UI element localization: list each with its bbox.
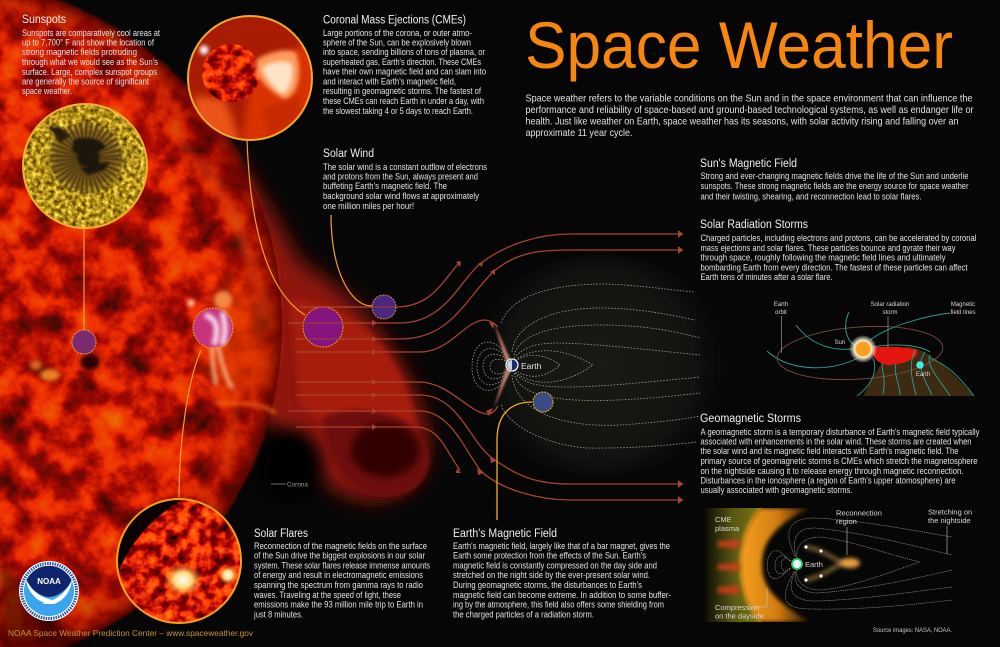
- text: solar flares: system. These solar flares release immense amounts: [254, 560, 430, 570]
- footer credit: NOAA Space Weather Prediction Center – www.spaceweather.gov: [8, 628, 254, 638]
- source credit: Source images: NASA, NOAA.: [873, 627, 952, 634]
- text: earth's magnetic field: magnetic field is constantly compressed on the day side and: [453, 560, 657, 570]
- text: solar flares: of energy and result in electromagnetic emissions: [254, 570, 424, 580]
- text: geomagnetic storms: usually associated with geomagnetic storms.: [700, 485, 852, 495]
- text: coronal mass ejections: into space, sending billions of tons of plasma, or: [323, 47, 485, 57]
- diagram: CME and magnetosphere: region: [836, 517, 857, 526]
- earth: [506, 359, 542, 371]
- text: geomagnetic storms: on the nightside causing it to release energy through magnetic reconnection.: [700, 466, 964, 476]
- text: earth's magnetic field: Earth's Magnetic Field: [453, 528, 557, 540]
- diagram: solar radiation storm: storm: [882, 310, 898, 316]
- diagram: CME and magnetosphere: [705, 508, 972, 622]
- diagram: CME and magnetosphere: plasma: [715, 524, 740, 533]
- diagram: solar radiation storm: Sun: [835, 340, 845, 346]
- text: solar wind: Solar Wind: [323, 148, 374, 160]
- text: sunspots: surface. Large, complex sunspot groups: [22, 67, 158, 77]
- marker: CME: [303, 307, 343, 347]
- text: sunspots: through what we would see as the Sun's: [22, 57, 159, 67]
- text: solar radiation storms: mass ejections and solar flares. These particles bounce and gyrate their way: [700, 243, 956, 253]
- text: sunspots: Sunspots: [22, 14, 66, 26]
- earth magnetic field lines: [472, 284, 700, 448]
- red lines over markers: [288, 307, 395, 339]
- earth magnetotail glow: [465, 255, 735, 475]
- diagram: solar radiation storm: orbit: [775, 310, 787, 316]
- text: solar radiation storms: Earth tens of minutes after a solar flare.: [700, 272, 832, 282]
- text: solar wind: and protons from the Sun, always present and: [323, 172, 478, 182]
- text: coronal mass ejections: these CMEs can reach Earth in under a day, with: [323, 96, 484, 106]
- text: solar flares: Reconnection of the magnetic fields on the surface: [254, 541, 427, 551]
- NOAA logo: NOAA: [37, 577, 61, 586]
- text: solar wind: one million miles per hour!: [323, 201, 414, 211]
- text: earth's magnetic field: Earth some protection from the effects of the Sun. Earth's: [453, 550, 647, 560]
- text: earth's magnetic field: [453, 528, 671, 620]
- text: solar radiation storms: bombarding Earth from every direction. The fastest of these particles can affect: [700, 262, 968, 272]
- diagram: solar radiation storm: Earth: [916, 372, 930, 378]
- title: Space Weather: [525, 8, 953, 82]
- text: solar radiation storms: Solar Radiation Storms: [700, 219, 808, 231]
- text: solar flares: just 8 minutes.: [253, 610, 303, 620]
- intro text: [526, 94, 974, 139]
- text: sun's magnetic field: Sun's Magnetic Field: [700, 158, 797, 170]
- NOAA logo: [19, 561, 79, 621]
- diagram: CME and magnetosphere: Compression: [715, 603, 759, 612]
- leader lines: [84, 140, 532, 520]
- corona label: [271, 482, 308, 488]
- marker: solar wind: [372, 295, 396, 319]
- text: sun's magnetic field: Strong and ever-changing magnetic fields drive the life of the Sun and underlie: [700, 171, 969, 181]
- diagram: solar radiation storm: field lines: [950, 310, 976, 316]
- text: sunspots: up to 7,700° F and show the location of: [22, 38, 154, 48]
- text: solar radiation storms: [700, 219, 977, 282]
- diagram: solar radiation storm: Earth: [774, 302, 788, 308]
- inset: CME photo: [187, 15, 313, 141]
- diagram: CME and magnetosphere: Reconnection: [836, 508, 882, 518]
- text: coronal mass ejections: superheated gas, Earth's direction. These CMEs: [323, 57, 482, 67]
- diagram: solar radiation storm: [767, 302, 976, 396]
- diagram: CME and magnetosphere: Stretching on: [928, 508, 972, 516]
- text: earth's magnetic field: magnetic field can become extreme. In addition to some buffer-: [453, 590, 671, 600]
- earth: Earth: [521, 361, 542, 371]
- text: solar radiation storms: through space, roughly following the magnetic field lines and ultimately: [700, 252, 946, 262]
- text: coronal mass ejections: resulting in geomagnetic storms. The fastest of: [323, 86, 481, 96]
- text: earth's magnetic field: Earth's magnetic field, largely like that of a bar magnet, gives the: [453, 541, 670, 551]
- text: geomagnetic storms: [700, 413, 980, 495]
- text: geomagnetic storms: Disturbances in the ionosphere (a region of Earth's upper atomosphere) are: [700, 476, 956, 486]
- text: earth's magnetic field: During geomagnetic storms, the disturbances to Earth's: [453, 580, 643, 590]
- text: solar flares: of the Sun drive the biggest explosions in our solar: [254, 550, 425, 560]
- text: coronal mass ejections: and interact with Earth's magnetic field,: [323, 76, 456, 86]
- text: sunspots: space weather.: [22, 86, 72, 96]
- text: geomagnetic storms: Geomagnetic Storms: [700, 413, 801, 425]
- inset: sunspot photo: [23, 104, 147, 228]
- text: sun's magnetic field: and their twisting, shearing, and reconnection lead to solar flares.: [700, 192, 922, 202]
- text: solar flares: Solar Flares: [254, 528, 308, 540]
- text: coronal mass ejections: the slowest taking 4 or 5 days to reach Earth.: [323, 106, 473, 116]
- text: solar flares: spanning the spectrum from gamma rays to radio: [254, 580, 423, 590]
- prominence loop: [322, 410, 429, 497]
- text: sunspots: strong magnetic fields protruding: [22, 47, 137, 57]
- text: sunspots: are generally the source of significant: [22, 76, 149, 86]
- earth in diagram: [916, 361, 924, 369]
- text: solar flares: [253, 528, 430, 620]
- intro text: approximate 11 year cycle.: [526, 128, 632, 139]
- diagram: CME and magnetosphere: on the dayside: [715, 612, 764, 620]
- text: geomagnetic storms: the solar wind and its magnetic field interacts with Earth's magnetic field. The: [700, 446, 959, 456]
- text: earth's magnetic field: ing by the atmosphere, this field also offers some shielding from: [453, 600, 664, 610]
- text: solar wind: The solar wind is a constant outflow of electrons: [323, 162, 488, 172]
- text: solar flares: emissions make the 93 million mile trip to Earth in: [254, 600, 423, 610]
- text: solar wind: buffeting Earth's magnetic field. The: [323, 181, 447, 191]
- diagram: CME and magnetosphere: Earth: [805, 560, 823, 569]
- text: sunspots: Sunspots are comparatively cool areas at: [22, 28, 160, 38]
- text: sunspots: [22, 14, 160, 96]
- marker: solar flare: [193, 308, 233, 348]
- corona label: Corona: [287, 482, 308, 488]
- text: solar wind: [323, 148, 488, 211]
- diagram: solar radiation storm: Solar radiation: [871, 302, 909, 308]
- text: coronal mass ejections: sphere of the Sun, can be explosively blown: [323, 38, 471, 48]
- marker: sunspot: [72, 330, 100, 370]
- inset: solar flare photo: [117, 495, 245, 630]
- text: solar wind: background solar wind flows at approximately: [323, 191, 480, 201]
- text: coronal mass ejections: Large portions of the corona, or outer atmo-: [323, 28, 472, 38]
- text: coronal mass ejections: Coronal Mass Ejections (CMEs): [323, 14, 466, 26]
- solar wind field lines: [288, 230, 683, 504]
- text: earth's magnetic field: stretched on the night side by the ever-present solar wind.: [453, 570, 650, 580]
- sun with corona: [0, 0, 429, 647]
- diagram: CME and magnetosphere: CME: [715, 515, 732, 524]
- marker: earth magnetic field: [533, 392, 553, 412]
- flare region: [188, 291, 232, 388]
- diagram: solar radiation storm: Magnetic: [951, 302, 975, 308]
- text: solar flares: waves. Traveling at the speed of light, these: [253, 590, 401, 600]
- text: coronal mass ejections: [323, 14, 486, 116]
- diagram: CME and magnetosphere: the nightside: [928, 516, 971, 525]
- text: coronal mass ejections: have their own magnetic field and can slam into: [323, 66, 486, 76]
- text: sun's magnetic field: [700, 158, 969, 202]
- text: earth's magnetic field: the charged particles of a radiation storm.: [453, 610, 594, 620]
